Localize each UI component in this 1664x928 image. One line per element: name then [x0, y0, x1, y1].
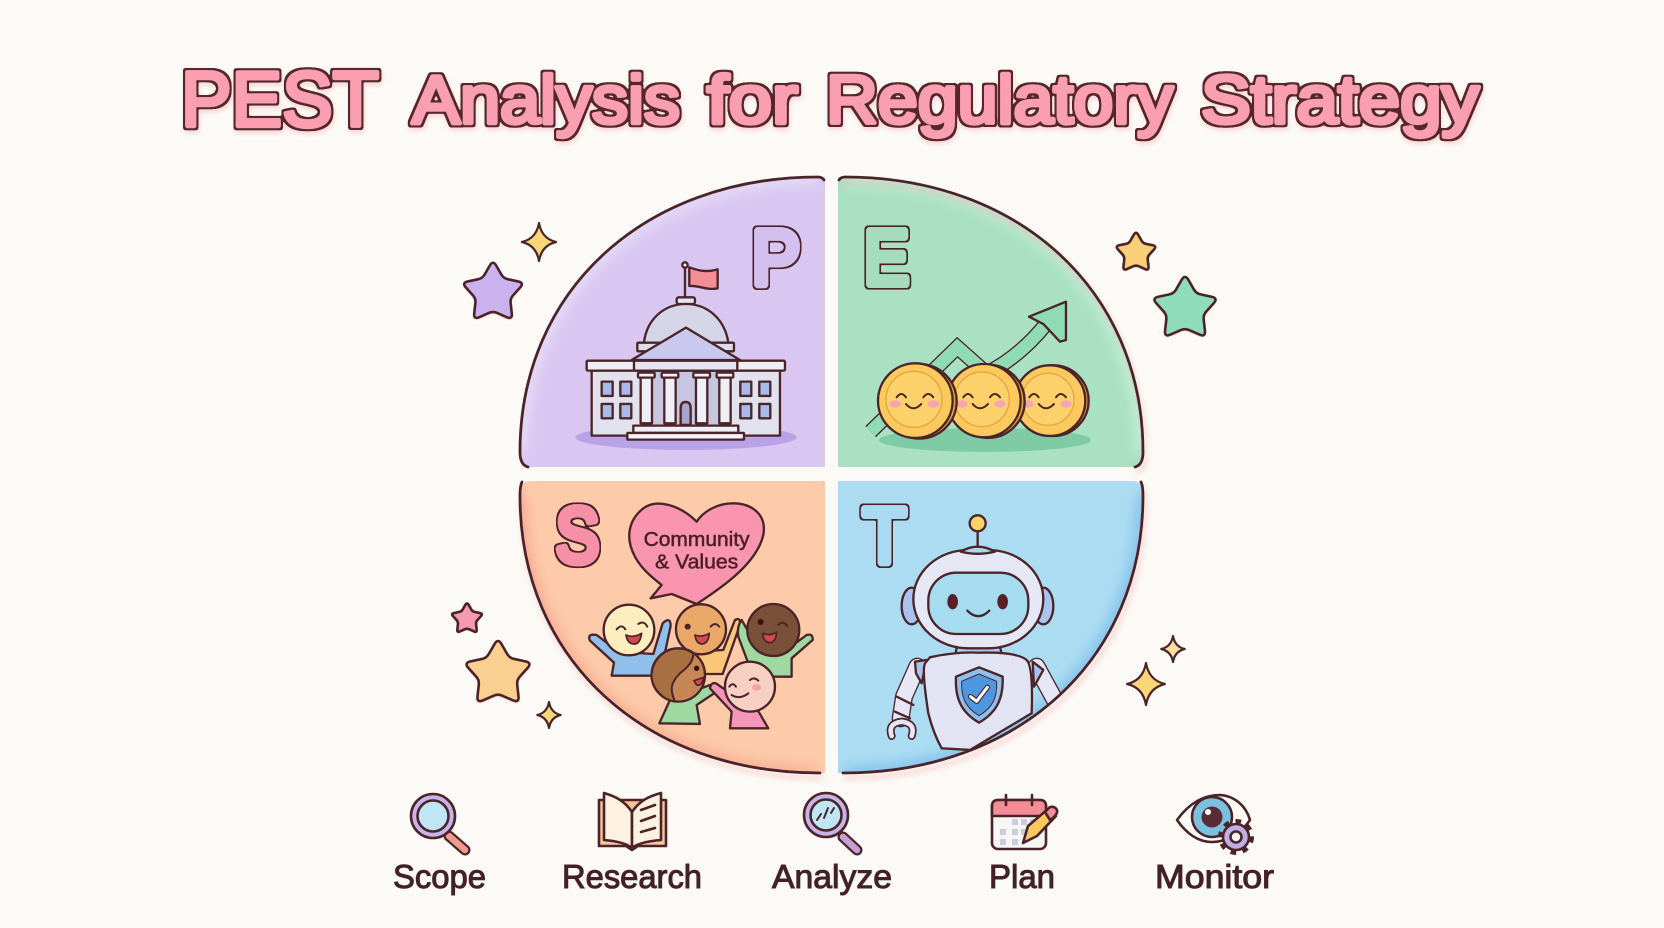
- callout: community and values heart: Community: [644, 528, 750, 551]
- letter S: S: [556, 493, 599, 579]
- star: lavender: [464, 263, 522, 318]
- step: plan: [989, 795, 1057, 895]
- sparkle: top left: [522, 223, 556, 261]
- step: scope: [393, 794, 486, 895]
- label: scope: Scope: [393, 858, 486, 895]
- label: research: Research: [562, 858, 702, 895]
- icon: smiling coins with growth arrow: [871, 302, 1091, 452]
- panel: political: [520, 177, 825, 467]
- panel: technological: [838, 481, 1143, 773]
- step: monitor: [1155, 795, 1274, 895]
- star: pink: [452, 603, 482, 632]
- icon: magnifier with data: [804, 793, 857, 850]
- callout: community and values heart: & Values: [655, 550, 738, 573]
- letter P: P: [752, 215, 800, 301]
- star: gold: [1117, 233, 1155, 270]
- sparkle: bottom right small: [1161, 636, 1185, 662]
- label: plan: Plan: [989, 858, 1055, 895]
- icon: calendar and pencil: [992, 795, 1057, 849]
- letter E: E: [864, 215, 909, 301]
- icon: open book: [599, 793, 666, 850]
- icon: magnifying glass: [411, 794, 465, 850]
- step: research: [562, 793, 702, 895]
- callout: community and values heart: [629, 503, 764, 604]
- title: Regulatory: [826, 62, 1173, 138]
- icon: eye with gear: [1177, 795, 1250, 851]
- title: for: [707, 62, 798, 138]
- title: [181, 55, 1479, 143]
- icon: cheering people: [589, 604, 813, 728]
- label: monitor: Monitor: [1155, 858, 1274, 895]
- letter T: T: [863, 493, 906, 579]
- title: Strategy: [1201, 62, 1479, 138]
- title: Analysis: [412, 62, 680, 138]
- icon: government building: [575, 262, 797, 450]
- infographic canvas: [182, 67, 1486, 896]
- step: analyze: [772, 793, 892, 895]
- star: green: [1154, 277, 1216, 335]
- panel: economic: [838, 177, 1143, 467]
- sparkle: bottom right large: [1127, 663, 1165, 705]
- label: analyze: Analyze: [772, 858, 892, 895]
- sparkle: bottom left: [537, 702, 561, 728]
- title: PEST: [181, 55, 379, 143]
- star: orange: [467, 641, 529, 701]
- panel: social: [520, 481, 825, 773]
- icon: robot with shield: [891, 515, 1057, 750]
